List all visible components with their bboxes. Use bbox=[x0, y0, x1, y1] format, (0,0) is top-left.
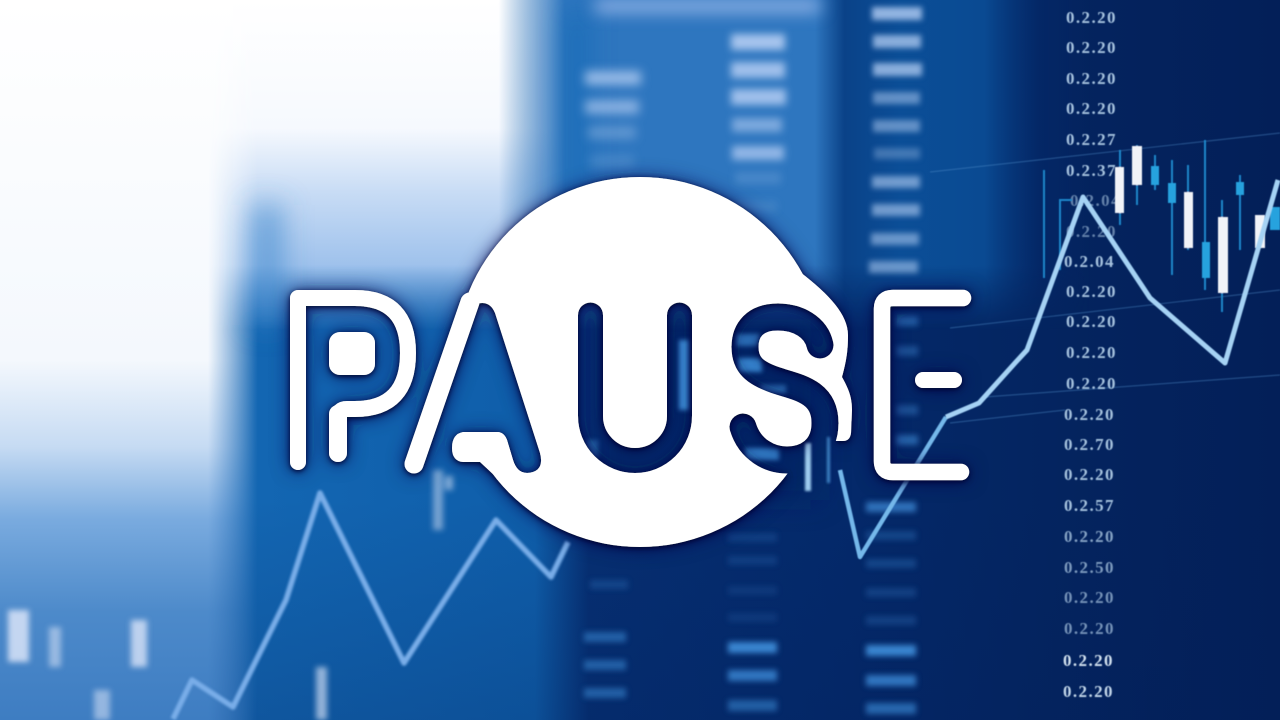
price number column: 0.2.37 bbox=[1066, 161, 1117, 180]
price number column: 0.2.70 bbox=[1064, 435, 1115, 454]
letter E bbox=[882, 298, 963, 472]
price number column: 0.2.20 bbox=[1066, 69, 1117, 88]
trend line left bbox=[173, 493, 568, 719]
price number column: 0.2.20 bbox=[1064, 527, 1115, 546]
blurred number column 3 bbox=[869, 7, 922, 273]
price number column: 0.2.20 bbox=[1066, 8, 1117, 27]
price number column: 0.2.20 bbox=[1066, 312, 1117, 331]
blurred number column 2 bbox=[731, 34, 786, 212]
logo disc with A U S cut out bbox=[442, 166, 858, 555]
PAUSE logo bbox=[298, 150, 980, 570]
price number column: 0.2.57 bbox=[1064, 496, 1115, 515]
price number column bbox=[1063, 8, 1121, 701]
price number column: 0.2.20 bbox=[1066, 343, 1117, 362]
letter P bbox=[298, 298, 408, 462]
price number column: 0.2.20 bbox=[1066, 282, 1117, 301]
price number column: 0.2.50 bbox=[1064, 558, 1115, 577]
price number column: 0.2.20 bbox=[1064, 588, 1115, 607]
price number column: 0.2.04 bbox=[1064, 252, 1115, 271]
price number column: 0.2.20 bbox=[1063, 682, 1114, 701]
price number column: 0.2.04 bbox=[1070, 191, 1121, 210]
small candlesticks near logo bbox=[805, 437, 830, 491]
price number column: 0.2.20 bbox=[1064, 619, 1115, 638]
price number column: 0.2.20 bbox=[1063, 651, 1114, 670]
price number column: 0.2.20 bbox=[1066, 38, 1117, 57]
price number column: 0.2.20 bbox=[1066, 374, 1117, 393]
blue streak and top strip bbox=[252, 10, 820, 500]
price number column: 0.2.20 bbox=[1066, 99, 1117, 118]
price number column: 0.2.20 bbox=[1066, 222, 1117, 241]
price number column: 0.2.27 bbox=[1066, 130, 1117, 149]
glints seen through the logo letters bbox=[586, 334, 786, 460]
price number column: 0.2.20 bbox=[1064, 465, 1115, 484]
blurred number column 1 bbox=[585, 71, 641, 167]
candlestick chart bbox=[1044, 140, 1280, 312]
blurred lower number columns bbox=[584, 316, 918, 714]
price number column: 0.2.20 bbox=[1064, 405, 1115, 424]
letter A left leg bbox=[414, 302, 470, 464]
trend line right bbox=[840, 180, 1278, 557]
left blurred candlesticks bbox=[8, 470, 453, 720]
faint chart grid lines bbox=[930, 133, 1280, 423]
